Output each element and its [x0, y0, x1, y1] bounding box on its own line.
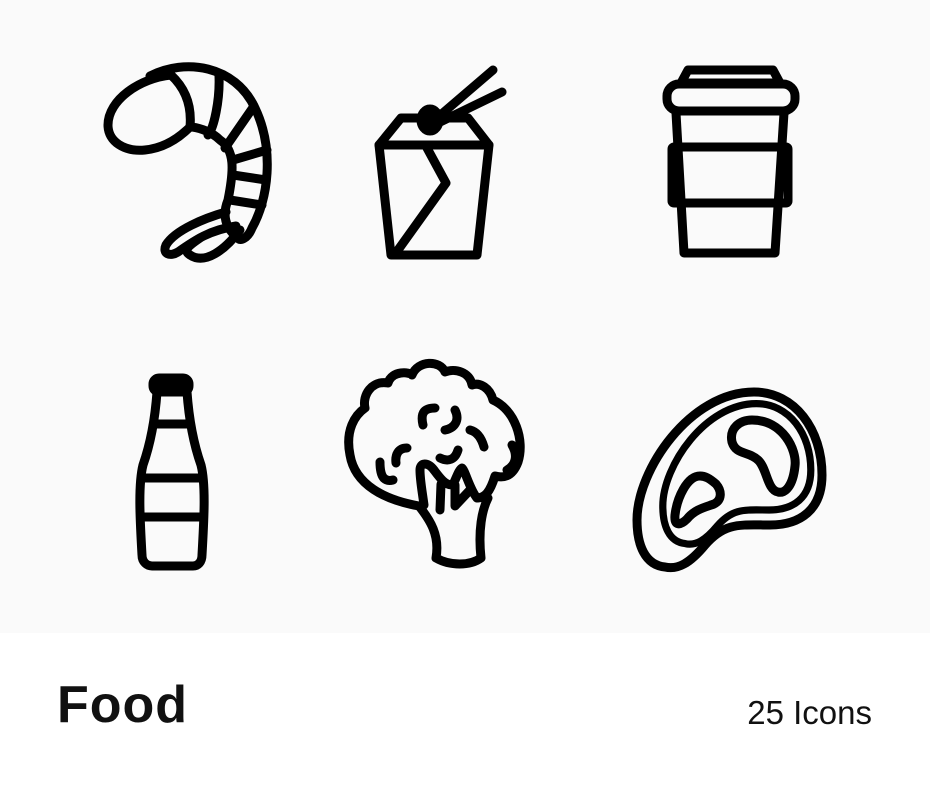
icon: bottle	[140, 378, 204, 566]
icon: broccoli	[349, 363, 520, 564]
icon: takeout box with chopsticks	[379, 70, 502, 255]
icon: shrimp	[108, 67, 267, 258]
icon: coffee cup	[667, 70, 795, 253]
icon count: 25 Icons	[747, 694, 872, 731]
icon: steak	[637, 392, 822, 568]
title: Food	[57, 676, 188, 734]
